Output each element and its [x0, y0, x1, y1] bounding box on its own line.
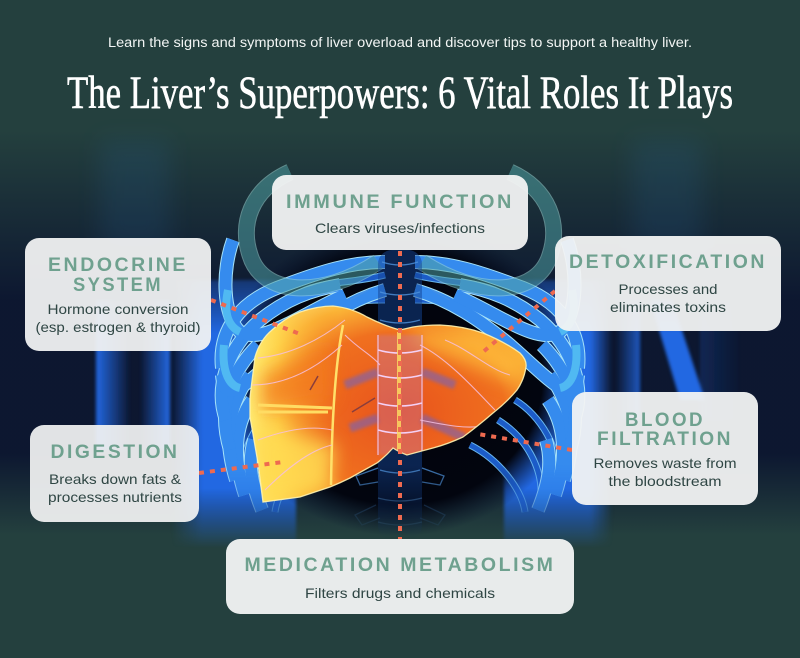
- panel: endocrine system: [25, 238, 211, 351]
- panel: immune function: IMMUNE FUNCTION: [286, 192, 514, 213]
- dotted connectors: [199, 251, 572, 540]
- arms: faint upper silhouettes: [100, 140, 702, 250]
- panel: digestion: Breaks down fats &: [49, 471, 182, 487]
- upper teal ribs: [246, 172, 554, 288]
- arms and torso blue: [96, 280, 740, 550]
- panel: immune function: Clears viruses/infections: [315, 220, 485, 236]
- spine: [350, 250, 450, 540]
- panel: medication metabolism: Filters drugs and chemicals: [305, 585, 495, 601]
- panel: detoxification: DETOXIFICATION: [569, 252, 767, 273]
- panel: detoxification: Processes and: [618, 281, 718, 297]
- panel: medication metabolism: MEDICATION METABOLISM: [244, 555, 556, 576]
- back ribs: [285, 275, 557, 512]
- liver outline: [250, 306, 526, 502]
- connector: immune function: [398, 251, 402, 540]
- highlighted rib segments: [224, 290, 576, 388]
- connector: digestion: [199, 462, 283, 473]
- liver pink veins: [252, 320, 510, 490]
- panel: blood filtration: BLOOD: [625, 410, 705, 431]
- panel: blood filtration: [572, 392, 758, 505]
- liver lobe fissures: [331, 325, 343, 485]
- panel: blood filtration: Removes waste from: [594, 455, 736, 471]
- dark navy band: [0, 130, 800, 535]
- panel: digestion: [30, 425, 199, 522]
- panel: medication metabolism: [226, 539, 574, 614]
- panel: endocrine system: Hormone conversion: [48, 301, 188, 317]
- illustration: skeleton and body: [96, 140, 740, 550]
- panel: immune function: [272, 175, 528, 250]
- panel: detoxification: eliminates toxins: [610, 299, 726, 315]
- panel: endocrine system: (esp. estrogen & thyroid): [36, 319, 200, 335]
- connector: detoxification: [483, 291, 555, 352]
- front ribs right: [415, 240, 578, 510]
- liver lower-left highlight: [255, 425, 335, 505]
- spine through liver: [345, 332, 465, 455]
- panel: digestion: DIGESTION: [50, 442, 180, 463]
- panel: digestion: processes nutrients: [48, 489, 182, 505]
- panel: endocrine system: ENDOCRINE: [48, 255, 188, 276]
- liver: [249, 305, 527, 503]
- panel: endocrine system: SYSTEM: [73, 275, 163, 296]
- liver top-right highlight: [405, 330, 525, 385]
- liver orange stripes left: [262, 345, 332, 412]
- connector: endocrine system: [211, 300, 300, 334]
- thoracic dark core: [222, 220, 578, 536]
- ribs: [222, 172, 578, 512]
- panel: blood filtration: FILTRATION: [597, 429, 733, 450]
- panel: blood filtration: the bloodstream: [608, 473, 722, 489]
- front ribs left: [222, 240, 385, 510]
- connector: blood filtration: [478, 434, 572, 450]
- panel: detoxification: [555, 236, 781, 331]
- subtitle: Learn the signs and symptoms of liver overload and discover tips to support a healthy liver.: [108, 35, 692, 50]
